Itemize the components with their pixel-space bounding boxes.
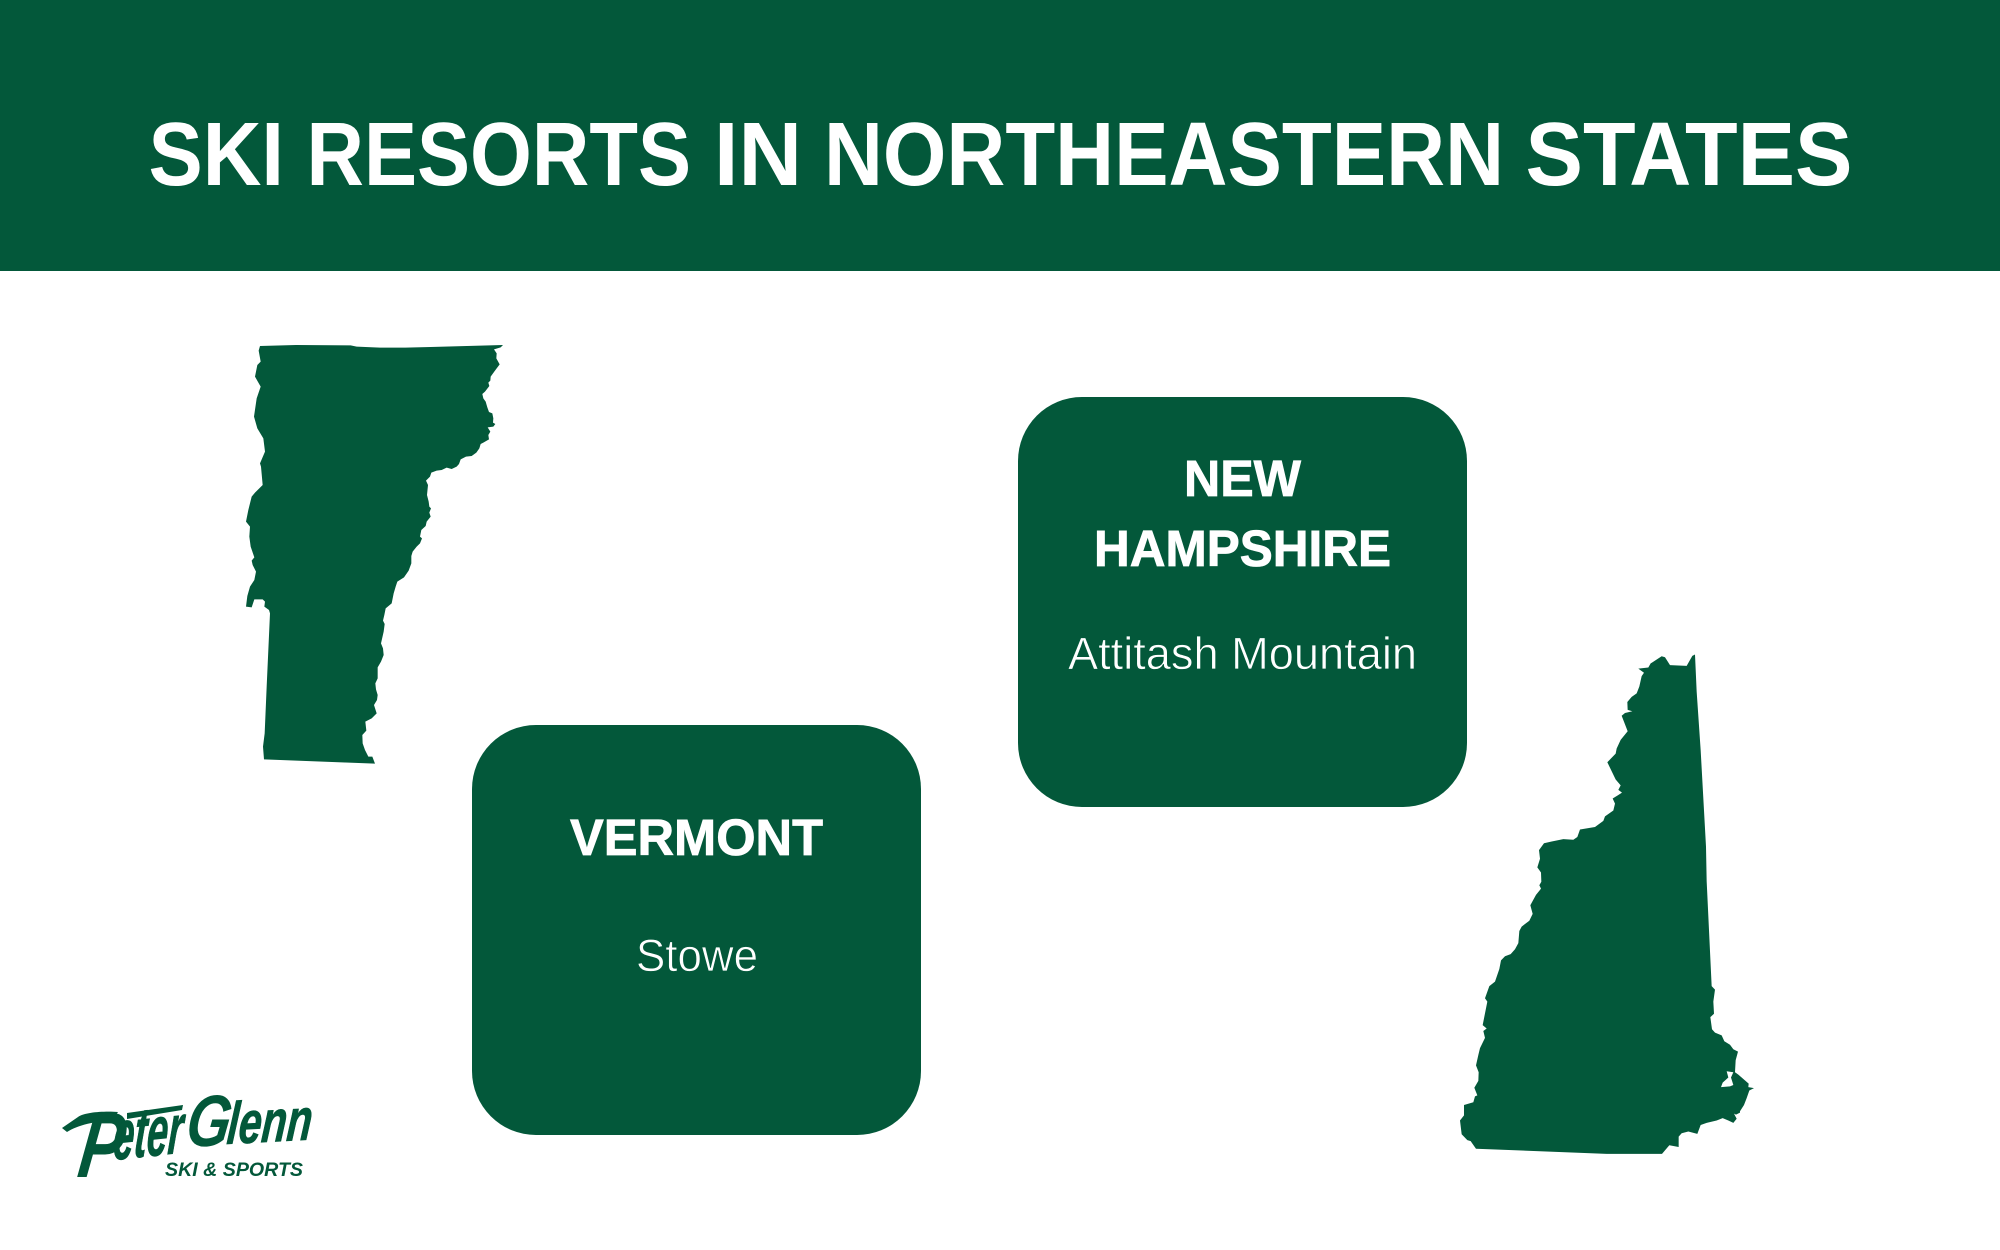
- map: New Hampshire silhouette: [1460, 654, 1754, 1154]
- logo: Peter Glenn Ski & Sports: SKI & SPORTS: [165, 1160, 303, 1181]
- header banner: [0, 0, 2000, 271]
- card heading: New Hampshire: NEW: [1184, 450, 1302, 507]
- logo: Peter Glenn Ski & Sports: P: [73, 1092, 132, 1197]
- title: NORTHEASTERN: [824, 105, 1504, 205]
- card heading: Vermont: VERMONT: [570, 809, 823, 866]
- title: RESORTS: [306, 105, 691, 205]
- logo: Peter Glenn Ski & Sports: [62, 1080, 316, 1197]
- logo: Peter Glenn Ski & Sports: lenn: [225, 1085, 316, 1157]
- title: IN: [714, 105, 802, 205]
- card: Vermont: [472, 725, 921, 1135]
- resort name: Stowe: Stowe: [636, 930, 758, 981]
- title: [148, 105, 1852, 205]
- map: Vermont silhouette: [246, 345, 503, 764]
- logo: Peter Glenn Ski & Sports: G: [182, 1080, 237, 1162]
- title: STATES: [1526, 105, 1852, 205]
- title: SKI: [148, 105, 284, 205]
- resort name: Attitash Mountain: Attitash Mountain: [1068, 628, 1417, 679]
- logo: Peter Glenn Ski & Sports: eter: [111, 1088, 188, 1175]
- card heading: New Hampshire: [1094, 450, 1391, 577]
- card: New Hampshire: [1018, 397, 1467, 807]
- card heading: New Hampshire: HAMPSHIRE: [1094, 520, 1391, 577]
